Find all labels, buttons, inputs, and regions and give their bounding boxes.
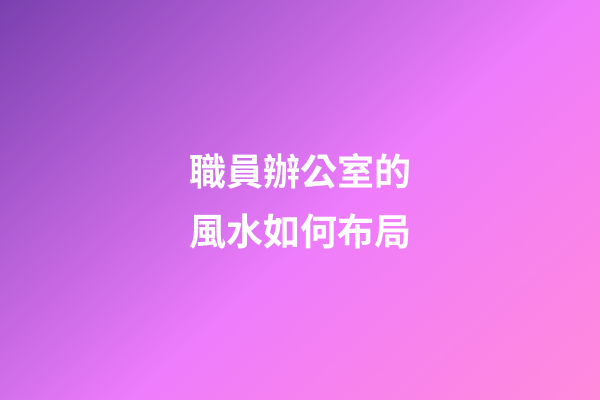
title bbox=[189, 152, 411, 252]
title line 1: 職員辦公室的 bbox=[189, 152, 411, 193]
title line 2: 風水如何布局 bbox=[189, 212, 411, 252]
